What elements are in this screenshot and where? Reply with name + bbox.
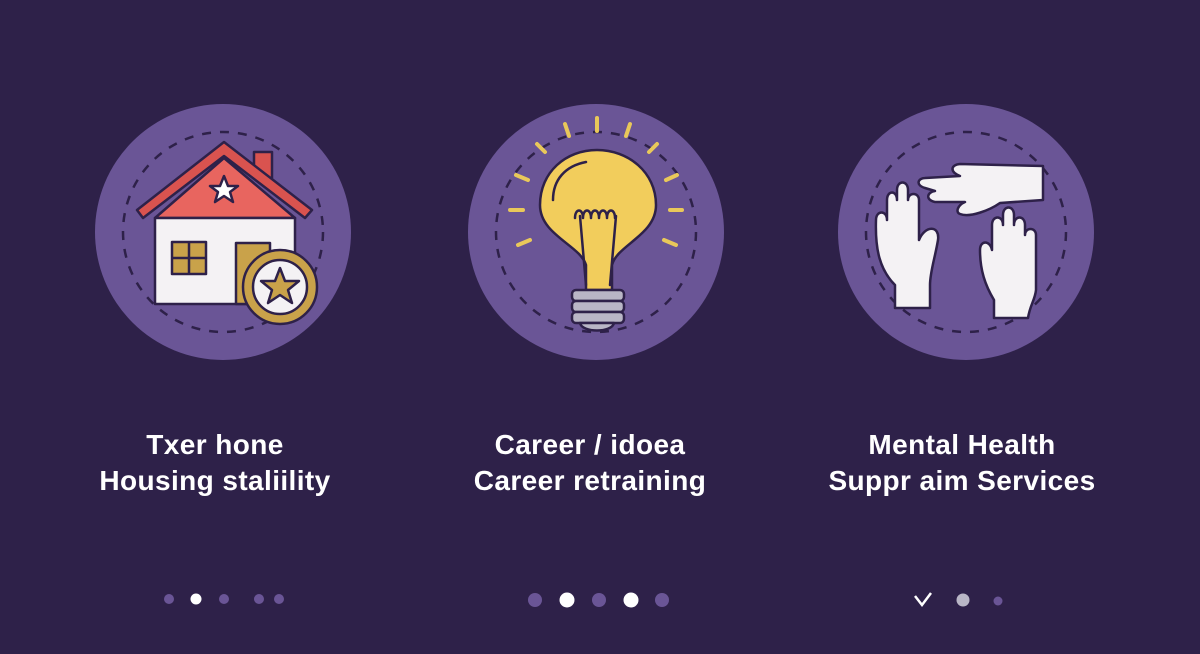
caption: housing bbox=[99, 429, 331, 496]
caption: housing: Txer hone bbox=[146, 429, 284, 460]
caption: mental health bbox=[828, 429, 1096, 496]
caption: career: Career / idoea bbox=[495, 429, 685, 460]
caption: career: Career retraining bbox=[474, 465, 706, 496]
caption: career bbox=[474, 429, 706, 496]
icon: house bbox=[137, 142, 317, 324]
icon: rays bbox=[510, 118, 682, 245]
caption: mental health: Suppr aim Services bbox=[828, 465, 1096, 496]
icon: bulb bbox=[540, 150, 656, 330]
caption: mental health: Mental Health bbox=[868, 429, 1056, 460]
pagination dots: left bbox=[164, 594, 284, 604]
pagination: right with check bbox=[915, 593, 1002, 606]
pagination dots: middle bbox=[528, 592, 669, 608]
caption: housing: Housing staliility bbox=[99, 465, 331, 496]
panel: lightbulb icon bbox=[468, 104, 724, 360]
panel: housing icon bbox=[95, 104, 351, 360]
panel: hands icon bbox=[838, 104, 1094, 360]
icon: hands bbox=[876, 164, 1043, 318]
